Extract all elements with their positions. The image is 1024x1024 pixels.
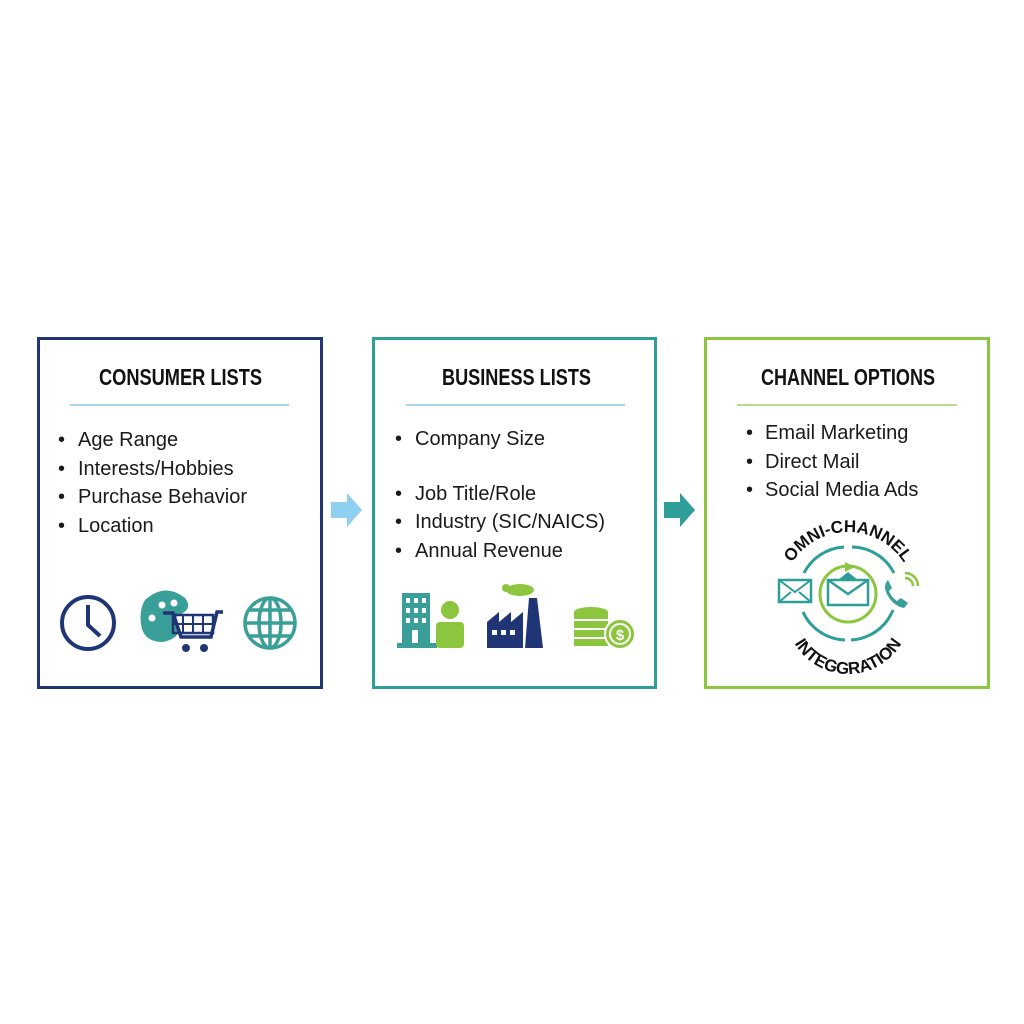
- bullet list: business: Annual Revenue: [415, 540, 563, 562]
- bullet list: consumer: •: [58, 486, 65, 508]
- icon: factory: [487, 584, 543, 648]
- diagram: omni-channel integration: INTEGGRATION: [795, 638, 902, 674]
- bullet list: business: Company Size: [415, 428, 545, 450]
- bullet list: channels: [746, 422, 918, 501]
- bullet list: channels: Email Marketing: [765, 422, 908, 444]
- panel: consumer lists: [38, 338, 322, 688]
- bullet list: consumer: Purchase Behavior: [78, 486, 247, 508]
- icon: globe: [245, 598, 295, 648]
- bullet list: consumer: •: [58, 458, 65, 480]
- heading: business lists: BUSINESS LISTS: [442, 364, 591, 390]
- icon: coins: $: [616, 627, 625, 644]
- diagram: omni-channel integration: OMNI-CHANNEL: [785, 520, 910, 562]
- bullet list: channels: Direct Mail: [765, 451, 859, 473]
- icon: clock: [62, 597, 114, 649]
- bullet list: consumer: Interests/Hobbies: [78, 458, 234, 480]
- bullet list: business: [395, 428, 605, 562]
- bullet list: channels: •: [746, 479, 753, 501]
- bullet list: business: •: [395, 483, 402, 505]
- diagram: omni-channel integration: [778, 520, 920, 674]
- bullet list: consumer: [58, 429, 247, 537]
- bullet list: channels: Social Media Ads: [765, 479, 918, 501]
- icon: coins: [574, 607, 635, 649]
- bullet list: consumer: Age Range: [78, 429, 178, 451]
- bullet list: business: •: [395, 511, 402, 533]
- bullet list: consumer: •: [58, 515, 65, 537]
- arrow: business to channel: [664, 493, 695, 527]
- heading: channel options: CHANNEL OPTIONS: [761, 364, 935, 390]
- panel: channel options: [704, 337, 990, 689]
- icon: palette and cart: [140, 590, 223, 652]
- bullet list: consumer: Location: [78, 515, 154, 537]
- bullet list: channels: •: [746, 422, 753, 444]
- bullet list: channels: •: [746, 451, 753, 473]
- icon: building and person: [397, 593, 464, 648]
- bullet list: business: •: [395, 540, 402, 562]
- bullet list: consumer: •: [58, 429, 65, 451]
- bullet list: business: •: [395, 428, 402, 450]
- arrow: consumer to business: [331, 493, 362, 527]
- bullet list: business: Job Title/Role: [415, 483, 536, 505]
- heading: consumer lists: CONSUMER LISTS: [99, 364, 262, 390]
- bullet list: business: Industry (SIC/NAICS): [415, 511, 605, 533]
- panel: business lists: [374, 338, 656, 688]
